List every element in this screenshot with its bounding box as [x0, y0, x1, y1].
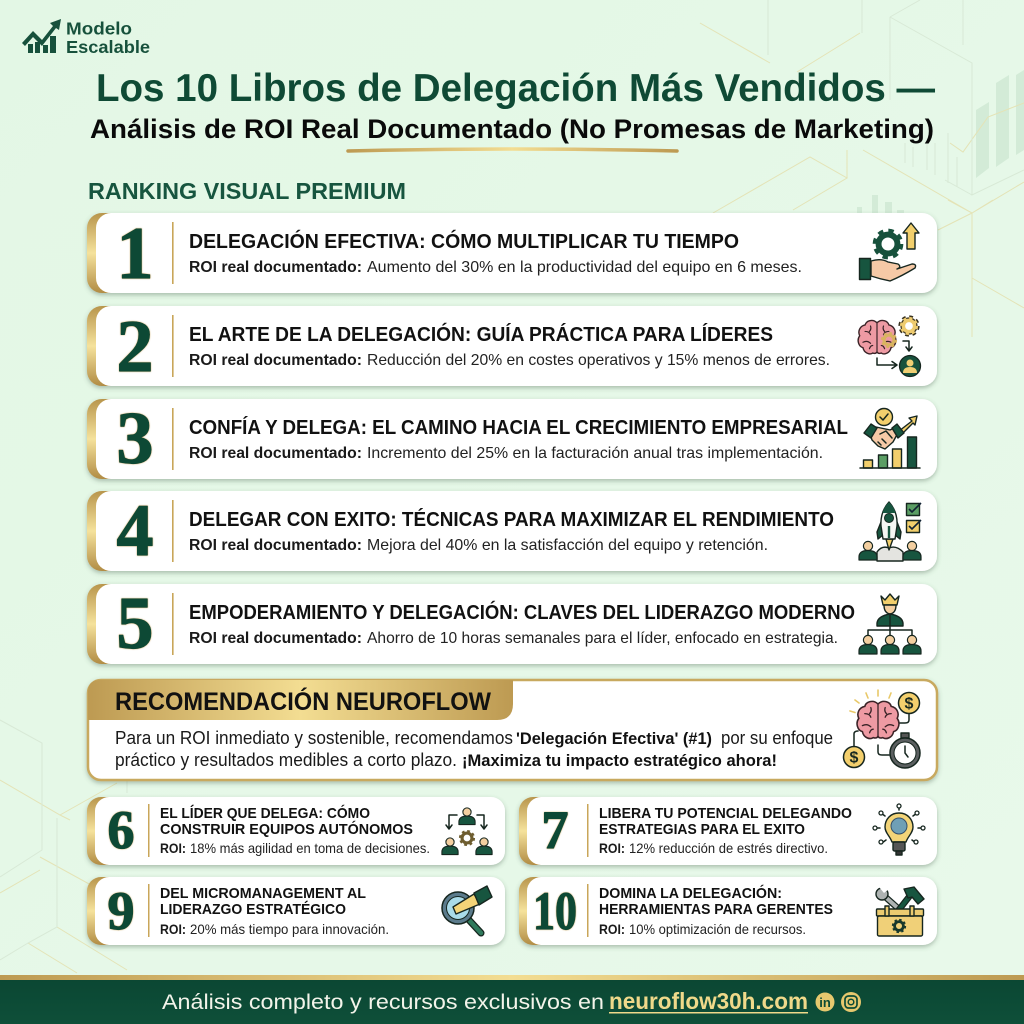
icon: rocket team and checklist: [859, 502, 921, 561]
card 9: DEL MICROMANAGEMENT AL: [160, 885, 366, 902]
icon: instagram: [841, 992, 861, 1012]
card 10: HERRAMIENTAS PARA GERENTES: [599, 901, 833, 918]
card 1: Aumento del 30% en la productividad del equipo en 6 meses.: [367, 259, 802, 276]
card 7: ESTRATEGIAS PARA EL EXITO: [599, 821, 805, 838]
card 4: Mejora del 40% en la satisfacción del equipo y retención.: [367, 537, 768, 554]
card 3: 3: [116, 398, 154, 480]
card 6: CONSTRUIR EQUIPOS AUTÓNOMOS: [160, 820, 413, 838]
card 4: 4: [116, 490, 154, 572]
panel: recomendación: práctico y resultados medibles a corto plazo.: [115, 750, 457, 770]
recommendation header tab: [88, 680, 513, 720]
card 9: 9: [108, 881, 134, 941]
panel: recomendación: 'Delegación Efectiva' (#1): [516, 729, 712, 748]
card 6: [87, 797, 505, 865]
footer: Análisis completo y recursos exclusivos en: [162, 991, 604, 1014]
icon: growth chart logo: [22, 19, 61, 53]
icon: brain, coins and stopwatch: [844, 690, 920, 768]
card 3: CONFÍA Y DELEGA: EL CAMINO HACIA EL CRECIMIENTO EMPRESARIAL: [189, 416, 848, 439]
icon: linkedin: [816, 992, 834, 1012]
card 1: ROI real documentado:: [189, 259, 362, 276]
icon: brain and gears: [858, 317, 920, 376]
card 1: [87, 213, 937, 295]
card 4: DELEGAR CON EXITO: TÉCNICAS PARA MAXIMIZAR EL RENDIMIENTO: [189, 508, 834, 531]
card 6: 6: [108, 800, 134, 860]
subtitle: Análisis de ROI Real Documentado (No Promesas de Marketing): [90, 114, 934, 144]
card 2: ROI real documentado:: [189, 352, 362, 369]
card 7: 12% reducción de estrés directivo.: [629, 840, 828, 856]
title: Los 10 Libros de Delegación Más Vendidos —: [96, 67, 935, 110]
icon: toolbox with wrench and hammer: [876, 885, 924, 936]
icon: magnifier and telescope: [442, 886, 492, 933]
panel: recomendación: [88, 680, 937, 780]
card 9: [87, 877, 505, 945]
logo: [22, 18, 150, 57]
card 10: 10% optimización de recursos.: [629, 921, 806, 937]
card 7: [519, 797, 937, 865]
section heading: RANKING VISUAL PREMIUM: [88, 178, 406, 204]
panel: recomendación: ¡Maximiza tu impacto estratégico ahora!: [462, 751, 777, 770]
card 4: ROI real documentado:: [189, 537, 362, 554]
card 5: ROI real documentado:: [189, 630, 362, 647]
card 9: LIDERAZGO ESTRATÉGICO: [160, 901, 346, 918]
card 7: 7: [542, 800, 568, 860]
card 7: ROI:: [599, 840, 625, 856]
card 3: ROI real documentado:: [189, 445, 362, 462]
icon: team and gear: [442, 808, 492, 855]
card 9: ROI:: [160, 921, 186, 937]
card 9: 20% más tiempo para innovación.: [190, 921, 389, 937]
card 6: EL LÍDER QUE DELEGA: CÓMO: [160, 804, 370, 822]
card 2: EL ARTE DE LA DELEGACIÓN: GUÍA PRÁCTICA PARA LÍDERES: [189, 322, 773, 346]
card 2: [87, 306, 937, 388]
card 10: ROI:: [599, 921, 625, 937]
card 10: 10: [533, 881, 577, 941]
icon: hand with gear and arrow: [860, 223, 919, 281]
icon: leader with crown and org chart: [859, 594, 921, 654]
card 5: EMPODERAMIENTO Y DELEGACIÓN: CLAVES DEL LIDERAZGO MODERNO: [189, 600, 855, 624]
card 3: Incremento del 25% en la facturación anual tras implementación.: [367, 445, 823, 462]
panel: recomendación: Para un ROI inmediato y sostenible, recomendamos: [115, 728, 513, 748]
panel: recomendación: por su enfoque: [721, 728, 833, 748]
card 6: ROI:: [160, 840, 186, 856]
card 5: 5: [116, 583, 154, 665]
card 2: Reducción del 20% en costes operativos y 15% menos de errores.: [367, 352, 830, 369]
card 5: Ahorro de 10 horas semanales para el líder, enfocado en estrategia.: [367, 630, 838, 647]
card 7: LIBERA TU POTENCIAL DELEGANDO: [599, 805, 852, 822]
icon: handshake and growth bars: [860, 408, 920, 468]
card 1: 1: [116, 213, 154, 295]
logo: Modelo: [66, 18, 132, 38]
card 6: 18% más agilidad en toma de decisiones.: [190, 840, 430, 856]
logo: Escalable: [66, 37, 150, 57]
card 3: [87, 398, 937, 480]
panel: recomendación: RECOMENDACIÓN NEUROFLOW: [115, 686, 491, 716]
link: neuroflow30h.com: [609, 988, 808, 1014]
card 10: DOMINA LA DELEGACIÓN:: [599, 884, 782, 902]
card 10: [519, 877, 937, 945]
icon: linkedin: in: [819, 995, 831, 1010]
card 5: [87, 583, 937, 665]
gold underline: [348, 149, 677, 151]
card 2: 2: [116, 306, 154, 388]
icon: light bulb with brain: [873, 804, 925, 855]
footer: [0, 975, 1024, 1024]
card 1: DELEGACIÓN EFECTIVA: CÓMO MULTIPLICAR TU TIEMPO: [189, 229, 739, 253]
card 4: [87, 490, 937, 572]
